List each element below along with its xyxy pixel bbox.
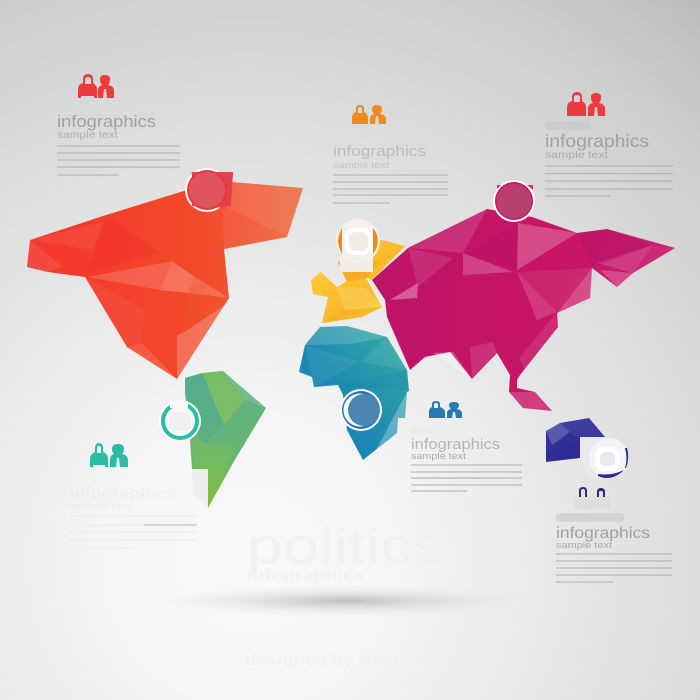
icon: orange people [352,105,386,124]
heading: bottom middle panel: sample text [411,451,466,462]
map: Africa (blue and teal) [299,326,409,460]
icon: blue people [429,401,462,418]
heading: top right panel: infographics [545,131,649,151]
icon: navy people, mostly faded [574,487,610,509]
heading: top middle panel: infographics [333,143,426,160]
heading: bottom left panel: infographics [70,484,175,503]
title: politics infographics, faded: infographics [247,567,365,584]
text lines: bottom left panel [70,516,197,548]
heading: top middle panel [333,143,426,170]
title: politics infographics, faded: politics [247,518,445,574]
heading: top left panel: infographics [57,113,156,131]
heading: bottom middle panel: infographics [411,437,500,453]
title: politics infographics, faded [247,518,445,584]
heading: bottom right panel: infographics [556,525,650,542]
text lines: top left panel [57,146,180,175]
icon: teal people [90,443,128,467]
text lines: bottom middle panel [411,465,522,491]
map: Europe (yellow) [311,240,405,323]
marker: blue [340,389,382,431]
marker: navy [580,437,629,478]
text lines: bottom right panel [556,554,672,582]
text lines: top right panel [545,166,673,196]
map: North America (red) [27,172,303,379]
heading: top right panel [545,121,649,161]
heading: bottom right panel: sample text [556,540,612,551]
map: Oceania (navy) [546,418,605,462]
map: South America (green) [185,371,266,508]
heading: bottom right panel [556,513,650,551]
text lines: top middle panel [333,175,448,203]
heading: top right panel: sample text [545,149,608,161]
heading: top left panel: sample text [57,130,118,141]
ground shadow [157,586,537,616]
heading: top middle panel: sample text [333,160,390,170]
marker: orange [336,219,380,272]
heading: top left panel [57,113,156,141]
heading: bottom middle panel [411,427,500,462]
marker: teal [159,400,201,442]
heading: bottom left panel: sample text [70,501,130,512]
marker: red [185,168,233,212]
heading: bottom left panel [70,484,175,512]
icon: red people, top right [567,92,605,116]
credit: designed by freepik, faded: designed by freepik [245,652,421,669]
icon: red people, top left [78,74,114,98]
patch: pale square on South America [192,469,208,508]
map: Asia and Europe (magenta) [372,209,675,411]
marker: magenta [493,180,535,222]
